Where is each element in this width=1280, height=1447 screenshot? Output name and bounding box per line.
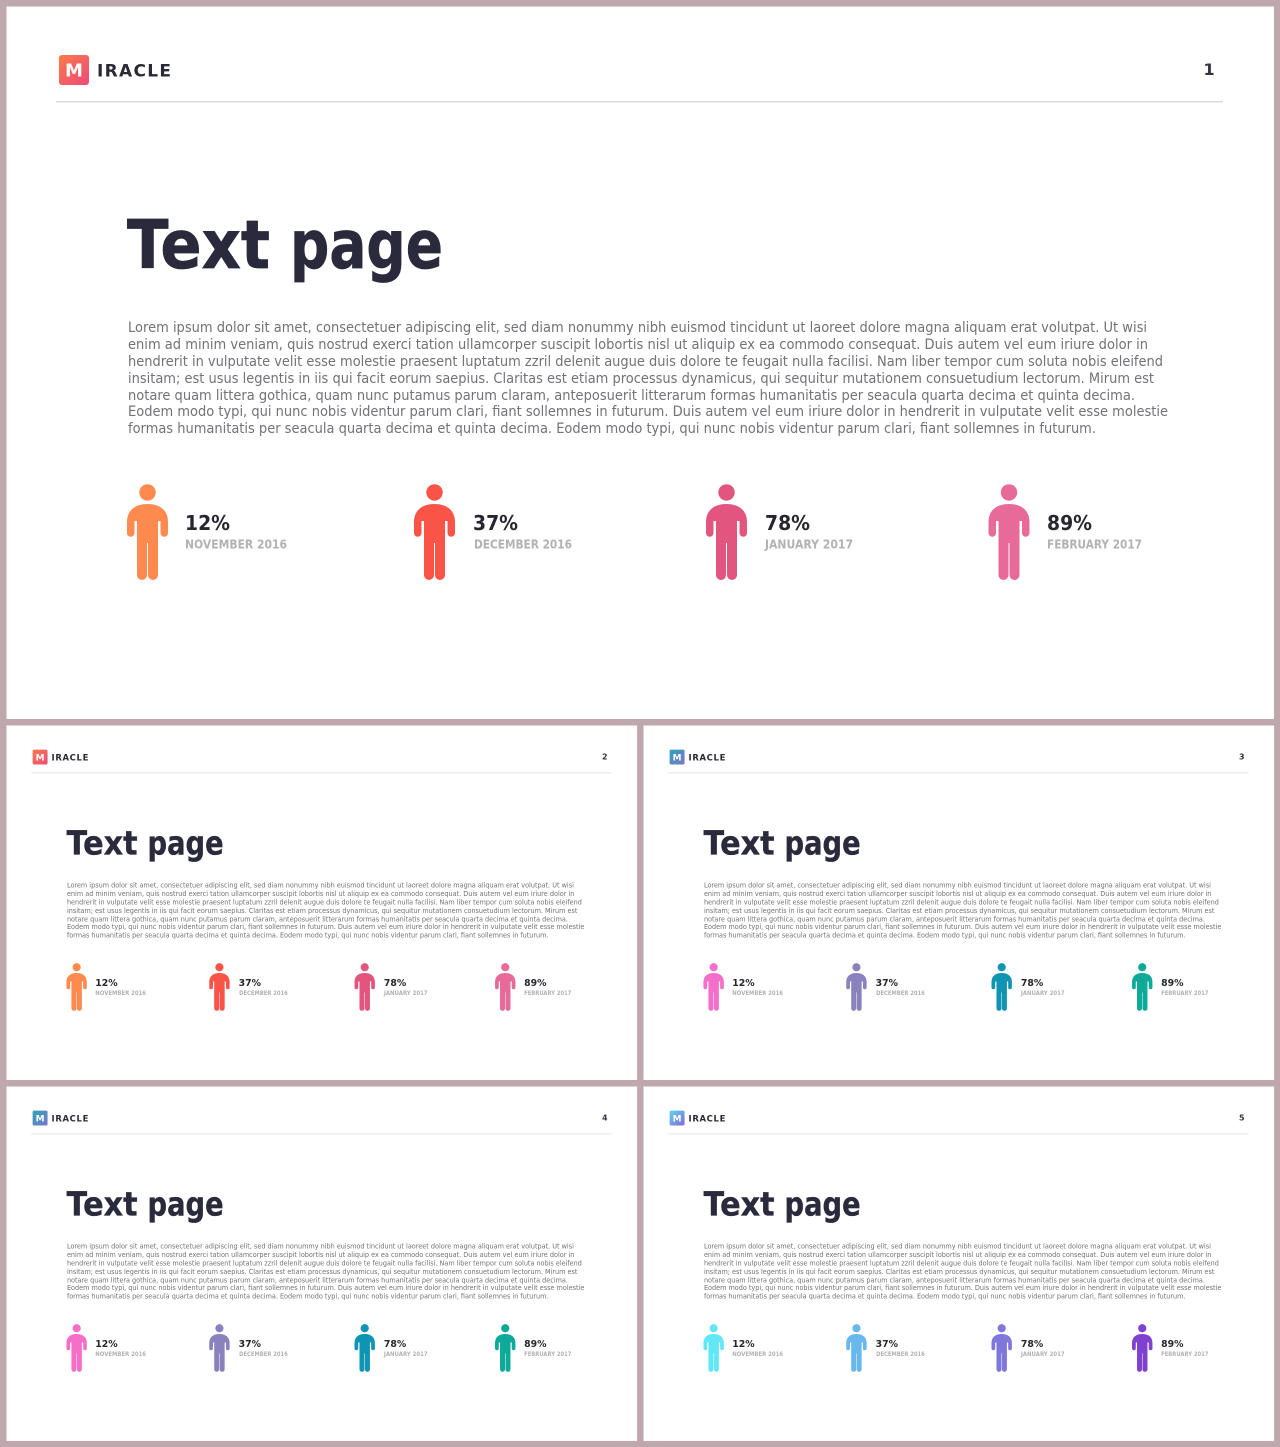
body text: hendrerit in vulputate velit esse molestie praesent luptatum zzril delenit augue duis dolore te feugait nulla facilisi. Nam liber tempor cum soluta nobis eleifend xyxy=(704,897,1219,906)
title: Text xyxy=(703,1185,775,1224)
page number: 1 xyxy=(1204,60,1215,79)
stat: January 2017 xyxy=(706,484,853,580)
logo xyxy=(33,750,89,765)
body text xyxy=(67,880,585,940)
body text: Lorem ipsum dolor sit amet, consectetuer adipiscing elit, sed diam nonummy nibh euismod tincidunt ut laoreet dolore magna aliquam erat volutpat. Ut wisi xyxy=(704,1241,1211,1250)
stat: December 2016: 37% xyxy=(473,511,518,535)
stat: January 2017: 78% xyxy=(1021,1339,1043,1350)
stat: December 2016: DECEMBER 2016 xyxy=(876,990,925,997)
body text: insitam; est usus legentis in iis qui facit eorum saepius. Claritas est etiam processus dynamicus, qui sequitur mutationem consuetudium lectorum. Mirum est xyxy=(704,1267,1215,1276)
stat: January 2017: 78% xyxy=(384,1339,406,1350)
logo: IRACLE xyxy=(689,1113,726,1123)
stat: February 2017 xyxy=(495,963,571,1011)
body text: enim ad minim veniam, quis nostrud exerci tation ullamcorper suscipit lobortis nisl ut aliquip ex ea commodo consequat. Duis autem vel eum iriure dolor in xyxy=(128,336,1148,353)
stat: February 2017 xyxy=(1132,963,1208,1011)
page number: 3 xyxy=(1239,753,1245,762)
title: page xyxy=(785,824,861,863)
body text: hendrerit in vulputate velit esse molestie praesent luptatum zzril delenit augue duis dolore te feugait nulla facilisi. Nam liber tempor cum soluta nobis eleifend xyxy=(704,1258,1219,1267)
body text: insitam; est usus legentis in iis qui facit eorum saepius. Claritas est etiam processus dynamicus, qui sequitur mutationem consuetudium lectorum. Mirum est xyxy=(67,906,578,915)
body text: Eodem modo typi, qui nunc nobis videntur parum clari, fiant sollemnes in futurum. Duis autem vel eum iriure dolor in hendrerit in vulputate velit esse molestie xyxy=(128,403,1168,420)
title xyxy=(127,206,443,284)
stat: November 2016 xyxy=(66,1324,147,1372)
logo: M xyxy=(673,753,682,763)
stat: February 2017 xyxy=(1132,1324,1208,1372)
body text: Eodem modo typi, qui nunc nobis videntur parum clari, fiant sollemnes in futurum. Duis autem vel eum iriure dolor in hendrerit in vulputate velit esse molestie xyxy=(67,1283,585,1292)
stat: November 2016: NOVEMBER 2016 xyxy=(95,1351,147,1358)
logo: IRACLE xyxy=(52,752,89,762)
stat: November 2016: NOVEMBER 2016 xyxy=(95,990,147,997)
panel: slide 4 xyxy=(6,1086,637,1441)
body text xyxy=(128,319,1168,437)
body text: hendrerit in vulputate velit esse molestie praesent luptatum zzril delenit augue duis dolore te feugait nulla facilisi. Nam liber tempor cum soluta nobis eleifend xyxy=(67,1258,582,1267)
body text xyxy=(704,880,1222,940)
stat: December 2016 xyxy=(846,963,925,1011)
title xyxy=(66,1185,224,1224)
title: Text xyxy=(703,824,775,863)
panel: slide 1 xyxy=(6,6,1274,719)
stat: February 2017: 89% xyxy=(524,1339,547,1350)
stat: January 2017 xyxy=(992,1324,1065,1372)
body text: notare quam littera gothica, quam nunc putamus parum claram, anteposuerit litterarum formas humanitatis per seacula quarta decima et quinta decima. xyxy=(704,914,1205,923)
stat: January 2017: JANUARY 2017 xyxy=(383,1351,428,1358)
logo: M xyxy=(36,1114,45,1124)
stat: November 2016: NOVEMBER 2016 xyxy=(732,990,784,997)
stat: February 2017: 89% xyxy=(1161,978,1184,989)
body text: insitam; est usus legentis in iis qui facit eorum saepius. Claritas est etiam processus dynamicus, qui sequitur mutationem consuetudium lectorum. Mirum est xyxy=(704,906,1215,915)
stat: November 2016 xyxy=(66,963,147,1011)
body text: enim ad minim veniam, quis nostrud exerci tation ullamcorper suscipit lobortis nisl ut aliquip ex ea commodo consequat. Duis autem vel eum iriure dolor in xyxy=(67,1250,574,1259)
body text: hendrerit in vulputate velit esse molestie praesent luptatum zzril delenit augue duis dolore te feugait nulla facilisi. Nam liber tempor cum soluta nobis eleifend xyxy=(128,353,1163,370)
stat: February 2017: 89% xyxy=(524,978,547,989)
stat: January 2017 xyxy=(355,1324,428,1372)
body text: notare quam littera gothica, quam nunc putamus parum claram, anteposuerit litterarum formas humanitatis per seacula quarta decima et quinta decima. xyxy=(128,387,1135,404)
title xyxy=(703,824,861,863)
stat: February 2017: 89% xyxy=(1161,1339,1184,1350)
title: Text xyxy=(127,206,270,284)
stat: January 2017 xyxy=(992,963,1065,1011)
body text: notare quam littera gothica, quam nunc putamus parum claram, anteposuerit litterarum formas humanitatis per seacula quarta decima et quinta decima. xyxy=(67,1275,568,1284)
title: page xyxy=(785,1185,861,1224)
stat: December 2016: 37% xyxy=(876,978,898,989)
body text: Lorem ipsum dolor sit amet, consectetuer adipiscing elit, sed diam nonummy nibh euismod tincidunt ut laoreet dolore magna aliquam erat volutpat. Ut wisi xyxy=(128,319,1147,336)
body text: enim ad minim veniam, quis nostrud exerci tation ullamcorper suscipit lobortis nisl ut aliquip ex ea commodo consequat. Duis autem vel eum iriure dolor in xyxy=(704,1250,1211,1259)
page number: 5 xyxy=(1239,1114,1245,1123)
stat: January 2017: 78% xyxy=(1021,978,1043,989)
stat: January 2017: 78% xyxy=(384,978,406,989)
stat: November 2016 xyxy=(703,963,784,1011)
body text: Lorem ipsum dolor sit amet, consectetuer adipiscing elit, sed diam nonummy nibh euismod tincidunt ut laoreet dolore magna aliquam erat volutpat. Ut wisi xyxy=(704,880,1211,889)
logo: IRACLE xyxy=(52,1113,89,1123)
logo: M xyxy=(36,753,45,763)
logo: M xyxy=(65,60,83,82)
stat: January 2017: JANUARY 2017 xyxy=(764,536,853,552)
stat: February 2017: FEBRUARY 2017 xyxy=(524,1351,571,1358)
panel: slide 5 xyxy=(644,1086,1274,1441)
body text: insitam; est usus legentis in iis qui facit eorum saepius. Claritas est etiam processus dynamicus, qui sequitur mutationem consuetudium lectorum. Mirum est xyxy=(128,370,1154,387)
stat: January 2017: JANUARY 2017 xyxy=(383,990,428,997)
stat: December 2016: 37% xyxy=(239,1339,261,1350)
body text: Eodem modo typi, qui nunc nobis videntur parum clari, fiant sollemnes in futurum. Duis autem vel eum iriure dolor in hendrerit in vulputate velit esse molestie xyxy=(704,922,1222,931)
panel: slide 3 xyxy=(644,726,1274,1080)
body text: Lorem ipsum dolor sit amet, consectetuer adipiscing elit, sed diam nonummy nibh euismod tincidunt ut laoreet dolore magna aliquam erat volutpat. Ut wisi xyxy=(67,1241,574,1250)
body text: formas humanitatis per seacula quarta decima et quinta decima. Eodem modo typi, qui nunc nobis videntur parum clari, fiant sollemnes in futurum. xyxy=(704,931,1186,940)
body text: notare quam littera gothica, quam nunc putamus parum claram, anteposuerit litterarum formas humanitatis per seacula quarta decima et quinta decima. xyxy=(704,1275,1205,1284)
stat: December 2016 xyxy=(846,1324,925,1372)
title xyxy=(703,1185,861,1224)
body text: formas humanitatis per seacula quarta decima et quinta decima. Eodem modo typi, qui nunc nobis videntur parum clari, fiant sollemnes in futurum. xyxy=(704,1292,1186,1301)
body text: enim ad minim veniam, quis nostrud exerci tation ullamcorper suscipit lobortis nisl ut aliquip ex ea commodo consequat. Duis autem vel eum iriure dolor in xyxy=(67,889,574,898)
stat: February 2017: FEBRUARY 2017 xyxy=(1047,536,1142,552)
stat: January 2017: 78% xyxy=(765,511,810,535)
body text: formas humanitatis per seacula quarta decima et quinta decima. Eodem modo typi, qui nunc nobis videntur parum clari, fiant sollemnes in futurum. xyxy=(128,420,1096,437)
logo xyxy=(670,750,726,765)
body text: formas humanitatis per seacula quarta decima et quinta decima. Eodem modo typi, qui nunc nobis videntur parum clari, fiant sollemnes in futurum. xyxy=(67,1292,549,1301)
body text: hendrerit in vulputate velit esse molestie praesent luptatum zzril delenit augue duis dolore te feugait nulla facilisi. Nam liber tempor cum soluta nobis eleifend xyxy=(67,897,582,906)
stat: November 2016: 12% xyxy=(185,511,230,535)
stat: November 2016: NOVEMBER 2016 xyxy=(185,536,287,552)
body text: enim ad minim veniam, quis nostrud exerci tation ullamcorper suscipit lobortis nisl ut aliquip ex ea commodo consequat. Duis autem vel eum iriure dolor in xyxy=(704,889,1211,898)
logo: M xyxy=(673,1114,682,1124)
stat: February 2017 xyxy=(495,1324,571,1372)
stat: November 2016 xyxy=(127,484,287,580)
stat: February 2017: FEBRUARY 2017 xyxy=(1161,990,1208,997)
title xyxy=(66,824,224,863)
body text xyxy=(67,1241,585,1301)
stat: February 2017: 89% xyxy=(1047,511,1092,535)
stat: November 2016: NOVEMBER 2016 xyxy=(732,1351,784,1358)
stat: January 2017: JANUARY 2017 xyxy=(1020,1351,1065,1358)
stat: November 2016: 12% xyxy=(95,1339,118,1350)
stat: November 2016 xyxy=(703,1324,784,1372)
logo: IRACLE xyxy=(689,752,726,762)
stat: February 2017: FEBRUARY 2017 xyxy=(1161,1351,1208,1358)
stat: December 2016: 37% xyxy=(239,978,261,989)
title: page xyxy=(290,206,443,284)
stat: February 2017 xyxy=(988,484,1142,580)
body text: notare quam littera gothica, quam nunc putamus parum claram, anteposuerit litterarum formas humanitatis per seacula quarta decima et quinta decima. xyxy=(67,914,568,923)
stat: December 2016 xyxy=(414,484,572,580)
stat: December 2016 xyxy=(209,963,288,1011)
logo: IRACLE xyxy=(97,62,171,82)
stat: December 2016 xyxy=(209,1324,288,1372)
logo xyxy=(670,1111,726,1126)
title: Text xyxy=(66,1185,138,1224)
stat: December 2016: DECEMBER 2016 xyxy=(474,536,572,552)
body text: Eodem modo typi, qui nunc nobis videntur parum clari, fiant sollemnes in futurum. Duis autem vel eum iriure dolor in hendrerit in vulputate velit esse molestie xyxy=(67,922,585,931)
body text: Lorem ipsum dolor sit amet, consectetuer adipiscing elit, sed diam nonummy nibh euismod tincidunt ut laoreet dolore magna aliquam erat volutpat. Ut wisi xyxy=(67,880,574,889)
stat: December 2016: DECEMBER 2016 xyxy=(876,1351,925,1358)
stat: December 2016: DECEMBER 2016 xyxy=(239,990,288,997)
title: page xyxy=(148,824,224,863)
stat: December 2016: DECEMBER 2016 xyxy=(239,1351,288,1358)
title: Text xyxy=(66,824,138,863)
body text: insitam; est usus legentis in iis qui facit eorum saepius. Claritas est etiam processus dynamicus, qui sequitur mutationem consuetudium lectorum. Mirum est xyxy=(67,1267,578,1276)
panel: slide 2 xyxy=(6,726,637,1080)
stat: November 2016: 12% xyxy=(95,978,118,989)
stat: January 2017 xyxy=(355,963,428,1011)
logo xyxy=(59,55,171,85)
body text xyxy=(704,1241,1222,1301)
page number: 4 xyxy=(602,1114,608,1123)
body text: formas humanitatis per seacula quarta decima et quinta decima. Eodem modo typi, qui nunc nobis videntur parum clari, fiant sollemnes in futurum. xyxy=(67,931,549,940)
page number: 2 xyxy=(602,753,608,762)
stat: February 2017: FEBRUARY 2017 xyxy=(524,990,571,997)
body text: Eodem modo typi, qui nunc nobis videntur parum clari, fiant sollemnes in futurum. Duis autem vel eum iriure dolor in hendrerit in vulputate velit esse molestie xyxy=(704,1283,1222,1292)
stat: January 2017: JANUARY 2017 xyxy=(1020,990,1065,997)
stat: November 2016: 12% xyxy=(732,1339,755,1350)
title: page xyxy=(148,1185,224,1224)
stat: December 2016: 37% xyxy=(876,1339,898,1350)
stat: November 2016: 12% xyxy=(732,978,755,989)
logo xyxy=(33,1111,89,1126)
